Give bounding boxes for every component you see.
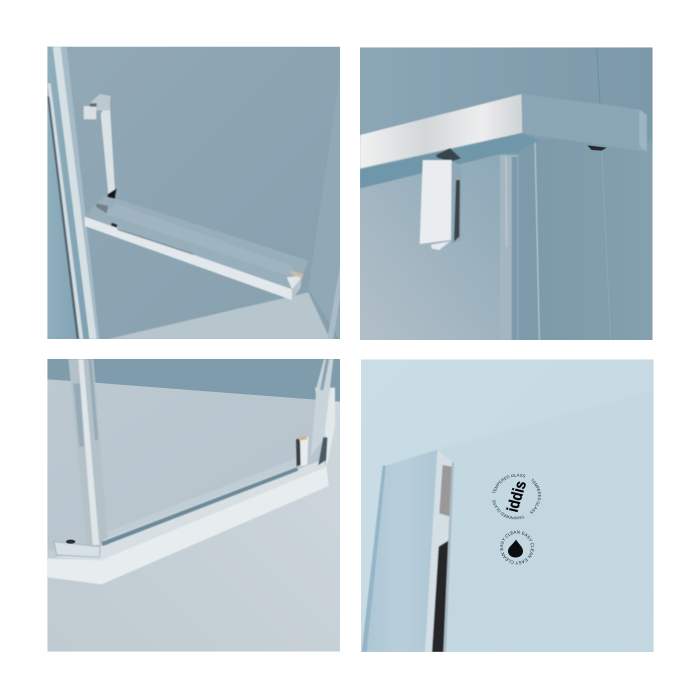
badge: tempered glass, iddis [492,474,541,520]
far corner post [311,359,333,457]
ring text: easy clean, first arc: EASY CLEAN [500,530,520,550]
back wall [47,47,340,339]
roller bracket [296,436,327,467]
faint wall plane [438,390,654,652]
profile left edge [362,466,386,652]
ring text: easy clean, third arc: EASY CLEAN [501,552,528,564]
rail underside [360,133,540,188]
pale wall [361,359,654,652]
logo: iddis: iddis [504,479,530,514]
lower wall corner line [602,150,611,340]
bottom rail corner piece [54,542,100,557]
panel: bottom rail on white shower tray [47,359,340,652]
right glass panel [507,140,653,340]
top wall band [47,359,340,402]
right glass edge [327,267,340,339]
glass wall reflection [47,379,327,550]
right side wall [308,195,340,338]
rail front face [360,94,523,168]
floor [108,292,330,339]
vertical glass channel [500,140,539,340]
near corner post [68,359,108,545]
panel: top rail with glass hinge [360,47,653,340]
profile side face with reflection [425,450,454,652]
white shower tray [47,388,335,584]
hinge [420,148,461,250]
upper handle bracket and vertical bar [84,94,119,207]
rail fixing [66,540,75,544]
ring text: tempered glass, second arc: TEMPERED GLASS [530,478,541,514]
icon: water drop [508,540,523,558]
floor [47,359,340,652]
left outer glass [47,47,90,339]
wall above rail [360,47,653,147]
left glass panel [360,140,510,340]
badge: easy clean [500,530,534,564]
ring text: tempered glass, third arc: TEMPERED GLASS [492,500,525,520]
rail corner cap [522,94,647,152]
door frame profile [47,47,99,339]
horizontal towel bar [85,196,308,300]
wall corner lines [597,47,600,103]
ring text: tempered glass, first arc: TEMPERED GLASS [492,474,526,494]
ring text: easy clean, second arc: EASY CLEAN [522,532,534,558]
rail cap fixing [587,145,607,151]
chrome profile front face [364,449,438,652]
panel: glass edge profile with badges [361,359,654,652]
panel: towel bar handle on glass door [47,47,340,340]
bottom glass rail [102,458,300,546]
